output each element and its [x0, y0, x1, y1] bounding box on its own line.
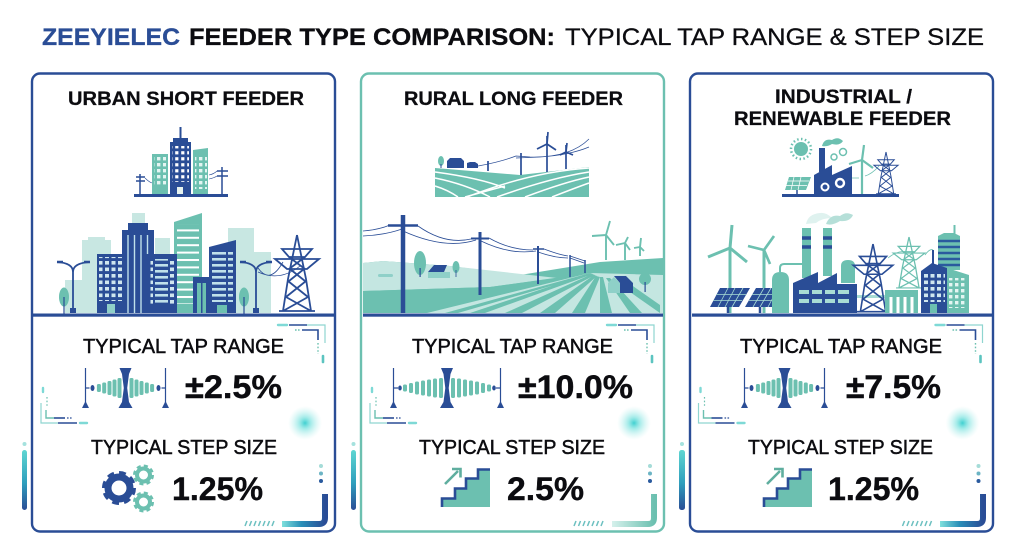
icon: right house and tree: [608, 273, 651, 293]
title: TYPICAL TAP RANGE & STEP SIZE: [565, 24, 984, 51]
label: typical tap range: TYPICAL TAP RANGE: [412, 335, 613, 358]
label: typical step size: TYPICAL STEP SIZE: [419, 436, 605, 459]
icon: stairs with arrow: [441, 469, 490, 507]
heading: industrial renewable feeder: [734, 86, 951, 130]
icon: chimneys and smoke: [802, 213, 853, 278]
decorations: industrial: [679, 325, 983, 526]
value: step size 1.25: 1.25%: [828, 471, 919, 507]
decorations: rural: [351, 325, 654, 526]
icon: small factory with renewables: [782, 138, 899, 197]
value: tap range 7.5: ±7.5%: [846, 369, 941, 405]
icon: left street lamp: [57, 262, 90, 313]
label: typical step size: TYPICAL STEP SIZE: [748, 436, 933, 459]
icon: solar panels: [710, 288, 785, 313]
icon: left house and trees: [414, 251, 460, 278]
title: ZEEYIELEC: [42, 24, 180, 51]
value: step size 2.5: 2.5%: [507, 471, 584, 507]
icon: tap range waveform: [741, 368, 828, 408]
decorations: urban: [22, 325, 325, 526]
illustration: city skyline: [57, 213, 319, 314]
panel: industrial renewable feeder: [679, 74, 993, 532]
panel: urban short feeder: [22, 74, 335, 532]
label: typical step size: TYPICAL STEP SIZE: [91, 436, 277, 459]
icon: stairs with arrow: [763, 469, 812, 507]
illustration: industrial and renewable skyline: [708, 213, 969, 313]
title: FEEDER TYPE COMPARISON:: [189, 24, 555, 51]
icon: turbines: [592, 221, 644, 260]
icon: gears: [104, 466, 152, 511]
icon: wind turbines: [708, 225, 774, 313]
label: typical tap range: TYPICAL TAP RANGE: [83, 335, 284, 358]
icon: factory: [793, 272, 857, 313]
value: tap range 2.5: ±2.5%: [185, 369, 282, 405]
value: tap range 10.0: ±10.0%: [518, 369, 633, 405]
label: typical tap range: TYPICAL TAP RANGE: [740, 335, 942, 358]
icon: utility poles and wires: [363, 215, 585, 313]
heading: rural long feeder: RURAL LONG FEEDER: [404, 88, 623, 110]
icon: office buildings: [921, 225, 969, 313]
icon: small city: [134, 127, 228, 197]
icon: right street lamp: [240, 262, 272, 313]
title: [42, 24, 984, 51]
heading: urban short feeder: URBAN SHORT FEEDER: [68, 88, 304, 110]
illustration: rural landscape: [363, 215, 663, 313]
icon: small farm landscape: [435, 132, 589, 197]
heading: industrial renewable feeder: INDUSTRIAL /: [775, 86, 913, 108]
panel: rural long feeder: [351, 74, 664, 532]
icon: tap range waveform: [82, 368, 169, 408]
icon: tap range waveform wide: [390, 368, 504, 408]
value: step size 1.25: 1.25%: [172, 471, 263, 507]
heading: industrial renewable feeder: RENEWABLE FEEDER: [734, 108, 951, 130]
